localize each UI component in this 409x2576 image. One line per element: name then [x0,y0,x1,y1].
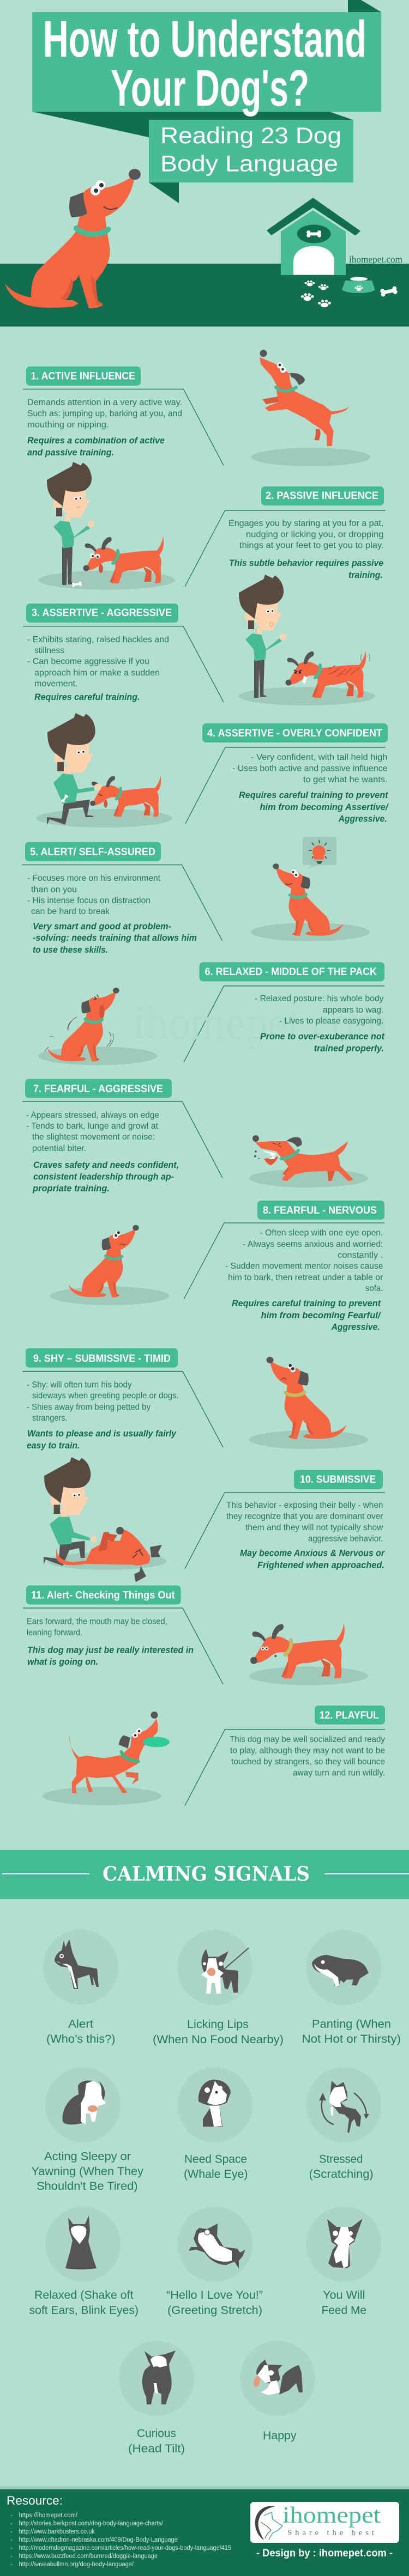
design credit: - Design by : ihomepet.com - [256,2548,393,2559]
section 12: playful: touched by strangers, so they will bounce [231,1757,385,1767]
section 6: relaxed middle of the pack: appears to wag. [323,1006,383,1015]
section 8: fearful nervous: him from becoming Fearful/ [261,1311,382,1320]
signal: happy: Happy [263,2429,297,2442]
signal: happy [240,2341,315,2442]
resource list: Resource: [7,2494,63,2507]
section 5: alert self-assured: - His intense focus on distraction [27,896,151,905]
resource list: http://moderndogmagazine.com/articles/how-read-your-dogs-body-language/415 [19,2545,231,2551]
signal: alert: Alert [68,2018,93,2031]
signal: relaxed: soft Ears, Blink Eyes) [29,2304,139,2317]
resource list: - [10,2561,13,2568]
section 12: playful: to play, although they may not want to be [230,1746,385,1755]
barking dog [249,1135,368,1187]
section 7: fearful aggressive: - Tends to bark, lunge and growl at [26,1122,159,1131]
logo card: ihomepet [282,2503,381,2528]
section 4: assertive overly confident [185,723,389,824]
section 10: submissive: Frightened when approached. [257,1560,384,1570]
section 12: playful [185,1706,385,1806]
signal: panting [302,1930,401,2045]
section 5: alert self-assured: than on you [31,885,77,894]
section 10: submissive [185,1470,386,1570]
section 9: shy submissive timid [23,1348,223,1451]
section 6: relaxed middle of the pack: Prone to over-exuberance not [260,1032,385,1042]
section 3: assertive aggressive: - Can become aggressive if you [27,657,149,666]
section 7: fearful aggressive [22,1079,222,1193]
section 11: alert checking things out: Ears forward, the mouth may be closed, [27,1617,167,1627]
resource list: - [10,2553,13,2560]
kneeling man and dog on its back [44,1457,166,1582]
section 4: assertive overly confident: him from becoming Assertive/ [260,802,389,812]
signal: you will feed me: You Will [323,2288,365,2301]
resource list: - [10,2520,13,2527]
section 11: alert checking things out: This dog may just be really interested in [27,1645,194,1655]
section 1: active influence: 1. ACTIVE INFLUENCE [31,370,135,382]
section 12: playful: 12. PLAYFUL [320,1709,379,1721]
section 10: submissive: them and they will not typically show [245,1523,383,1532]
calming signals banner [0,1850,409,1899]
section 11: alert checking things out [23,1585,223,1684]
section 7: fearful aggressive: Craves safety and needs confident, [33,1160,179,1170]
header dog [5,169,141,308]
section 4: assertive overly confident: Aggressive. [338,814,387,824]
section 4: assertive overly confident: - Uses both active and passive influence [232,764,388,774]
food bowl, paw prints and bone [301,277,398,307]
section 7: fearful aggressive: 7. FEARFUL - AGGRESSIVE [33,1083,163,1095]
section 10: submissive: they recognize that you are dominant over [226,1512,383,1521]
section 6: relaxed middle of the pack [133,962,389,1062]
section 5: alert self-assured: - Focuses more on his environment [27,874,161,883]
signal: curious head tilt: (Head Tilt) [128,2442,185,2455]
section 5: alert self-assured: 5. ALERT/ SELF-ASSURED [30,846,155,858]
signal: panting: Panting (When [312,2018,391,2031]
section 5: alert self-assured: can be hard to break [31,907,110,916]
man and sniffing dog [39,462,175,590]
signal: you will feed me: Feed Me [322,2304,366,2317]
header ground [0,264,409,327]
logo card: Share the best [287,2529,375,2537]
section 10: submissive: May become Anxious & Nervous or [240,1549,386,1558]
alert standing dog [249,1623,368,1685]
resource list: - [10,2529,13,2535]
section 4: assertive overly confident: Requires careful training to prevent [239,790,389,800]
section 6: relaxed middle of the pack: trained properly. [314,1044,384,1053]
signal: need space: (Whale Eye) [184,2167,248,2181]
section 5: alert self-assured: to use these skills. [33,945,108,955]
section 11: alert checking things out: leaning forward. [27,1628,82,1637]
section 2: passive influence: nudging or licking you, or dropping [246,530,384,539]
section 2: passive influence: training. [348,570,383,580]
title ribbon [32,0,381,203]
relaxed wagging dog [38,988,157,1065]
section 2: passive influence: This subtle behavior requires passive [229,558,383,568]
section 5: alert self-assured [22,842,222,955]
section 1: active influence: Demands attention in a very active way. [27,398,182,407]
section 1: active influence [23,367,224,465]
section 2: passive influence [185,486,386,587]
dog house [267,198,360,275]
signal: hello I love you [166,2207,263,2317]
section 1: active influence: and passive training. [27,448,114,458]
signal: licking lips: Licking Lips [187,2018,249,2031]
section 3: assertive aggressive: Requires careful training. [34,692,140,702]
signal: you will feed me [306,2207,382,2317]
section 12: playful: This dog may be well socialized and ready [230,1735,385,1744]
section 6: relaxed middle of the pack: ihomepet.com [133,997,389,1050]
section 2: passive influence: things at your feet to get you to play. [239,541,384,550]
resource list: - [10,2512,13,2519]
signal: stressed: Stressed [319,2153,363,2166]
section 3: assertive aggressive: approach him or make a sudden [34,668,160,678]
nervous dog [50,1225,169,1305]
section 7: fearful aggressive: potential biter. [32,1144,86,1153]
section 10: submissive: 10. SUBMISSIVE [300,1473,376,1485]
signal: hello I love you: “Hello I Love You!” [166,2288,263,2301]
resource list: http://www.chadron-nebraska.com/409/Dog-Body-Language [19,2537,178,2543]
footer background [0,2489,409,2576]
signal: alert: (Who’s this?) [46,2032,116,2045]
section 10: submissive: aggressive behavior. [308,1534,383,1543]
signal: acting sleepy or yawning: Yawning (When They [31,2165,143,2178]
signal: relaxed [29,2207,139,2317]
title ribbon: Your Dog's? [111,59,309,117]
playful dog with frisbee [43,1712,170,1805]
signal: stressed: (Scratching) [309,2167,374,2181]
section 8: fearful nervous: Aggressive. [331,1323,380,1332]
section 4: assertive overly confident: - Very confident, with tail held high [251,753,387,762]
section 8: fearful nervous: constantly . [338,1251,383,1260]
section 8: fearful nervous [184,1201,384,1332]
section 6: relaxed middle of the pack: - Lives to please easygoing. [279,1016,383,1026]
section 1: active influence: Such as: jumping up, barking at you, and [27,409,182,418]
section 9: shy submissive timid: strangers. [32,1414,67,1423]
signal: relaxed: Relaxed (Shake oft [34,2288,134,2301]
signal: stressed [306,2067,382,2181]
section 8: fearful nervous: sofa. [365,1284,383,1293]
signal: curious head tilt: Curious [137,2427,176,2440]
subtitle ribbon: Reading 23 Dog [160,123,341,148]
section 8: fearful nervous: - Often sleep with one eye open. [260,1228,383,1238]
resource list [7,2494,231,2568]
signal: hello I love you: (Greeting Stretch) [167,2304,262,2317]
section 7: fearful aggressive: propriate training. [32,1184,110,1193]
section 1: active influence: mouthing or nipping. [27,421,109,429]
section 8: fearful nervous: - Sudden movement mentor noises cause [225,1262,383,1271]
section 7: fearful aggressive: - Appears stressed, always on edge [26,1111,159,1120]
section 8: fearful nervous: him to bark, then retreat under a table or [228,1273,383,1282]
section 4: assertive overly confident: to get what he wants. [303,775,387,784]
resource list: https://www.buzzfeed.com/burnred/doggie-language [19,2553,158,2560]
section 8: fearful nervous: Requires careful training to prevent [232,1299,381,1308]
jumping dog [251,350,370,466]
section 8: fearful nervous: 8. FEARFUL - NERVOUS [263,1204,377,1216]
section 10: submissive: This behavior - exposing their belly - when [226,1501,383,1510]
resource list: http://www.barkbusters.co.uk [19,2529,95,2535]
footer shadow band [0,2486,409,2489]
section 6: relaxed middle of the pack: 6. RELAXED - MIDDLE OF THE PACK [205,966,377,978]
signal: curious head tilt [119,2341,194,2455]
section 3: assertive aggressive [23,604,224,702]
section 3: assertive aggressive: - Exhibits staring, raised hackles and [27,635,169,644]
section 11: alert checking things out: 11. Alert- Checking Things Out [31,1590,175,1601]
section 11: alert checking things out: what is going on. [27,1657,98,1667]
section 4: assertive overly confident: 4. ASSERTIVE - OVERLY CONFIDENT [207,727,382,739]
section 9: shy submissive timid: - Shy: will often turn his body [27,1380,132,1390]
section 9: shy submissive timid: Wants to please and is usually fairly [27,1429,177,1439]
subtitle ribbon [149,120,353,182]
signal: alert [43,1929,118,2045]
shy dog with gold collar [249,1357,368,1449]
section 9: shy submissive timid: - Shies away from being petted by [27,1403,151,1412]
section 9: shy submissive timid: sideways when greeting people or dogs. [32,1391,179,1400]
man and aggressive dog [239,575,375,705]
section 6: relaxed middle of the pack: - Relaxed posture: his whole body [255,994,383,1003]
section 3: assertive aggressive: stillness [34,646,64,655]
signal: acting sleepy or yawning: Shouldn't Be Tired) [37,2179,138,2193]
resource list: https://ihomepet.com/ [19,2512,78,2519]
section 12: playful: away turn and run wildly. [293,1768,385,1778]
section 2: passive influence: Engages you by staring at you for a pat, [228,519,384,528]
resource list: http://saveabullmn.org/dog-body-language/ [19,2561,134,2568]
resource list: http://stories.barkpost.com/dog-body-language-charts/ [19,2520,164,2527]
resource list: - [10,2537,13,2543]
section 9: shy submissive timid: 9. SHY – SUBMISSIVE - TIMID [33,1353,171,1365]
section 5: alert self-assured: -solving: needs training that allows him [33,933,197,943]
resource list: - [10,2545,13,2551]
section 7: fearful aggressive: the slightest movement or noise: [32,1132,155,1142]
section 5: alert self-assured: Very smart and good at problem- [33,922,171,931]
section 3: assertive aggressive: 3. ASSERTIVE - AGGRESSIVE [32,607,172,619]
kneeling man and confident dog [36,713,172,827]
section 7: fearful aggressive: consistent leadership through ap- [33,1172,174,1182]
signal: acting sleepy or yawning: Acting Sleepy or [44,2149,131,2163]
section 2: passive influence: 2. PASSIVE INFLUENCE [266,490,378,502]
subtitle ribbon: Body Language [160,150,338,176]
thinking dog with light bulb [251,837,370,941]
logo card [250,2502,399,2543]
signal: need space: Need Space [184,2153,247,2166]
section 9: shy submissive timid: easy to train. [27,1441,80,1451]
signal: acting sleepy or yawning [31,2067,143,2193]
calming signals banner: CALMING SIGNALS [103,1863,310,1886]
section 1: active influence: Requires a combination of active [27,436,165,446]
section 3: assertive aggressive: movement. [34,679,78,689]
signal: licking lips: (When No Food Nearby) [153,2033,284,2046]
site label: ihomepet.com [349,254,402,265]
signal: licking lips [153,1930,284,2046]
signal: panting: Not Hot or Thirsty) [302,2032,401,2045]
signal: need space [177,2067,252,2181]
section 8: fearful nervous: - Always seems anxious and worried: [243,1240,383,1249]
